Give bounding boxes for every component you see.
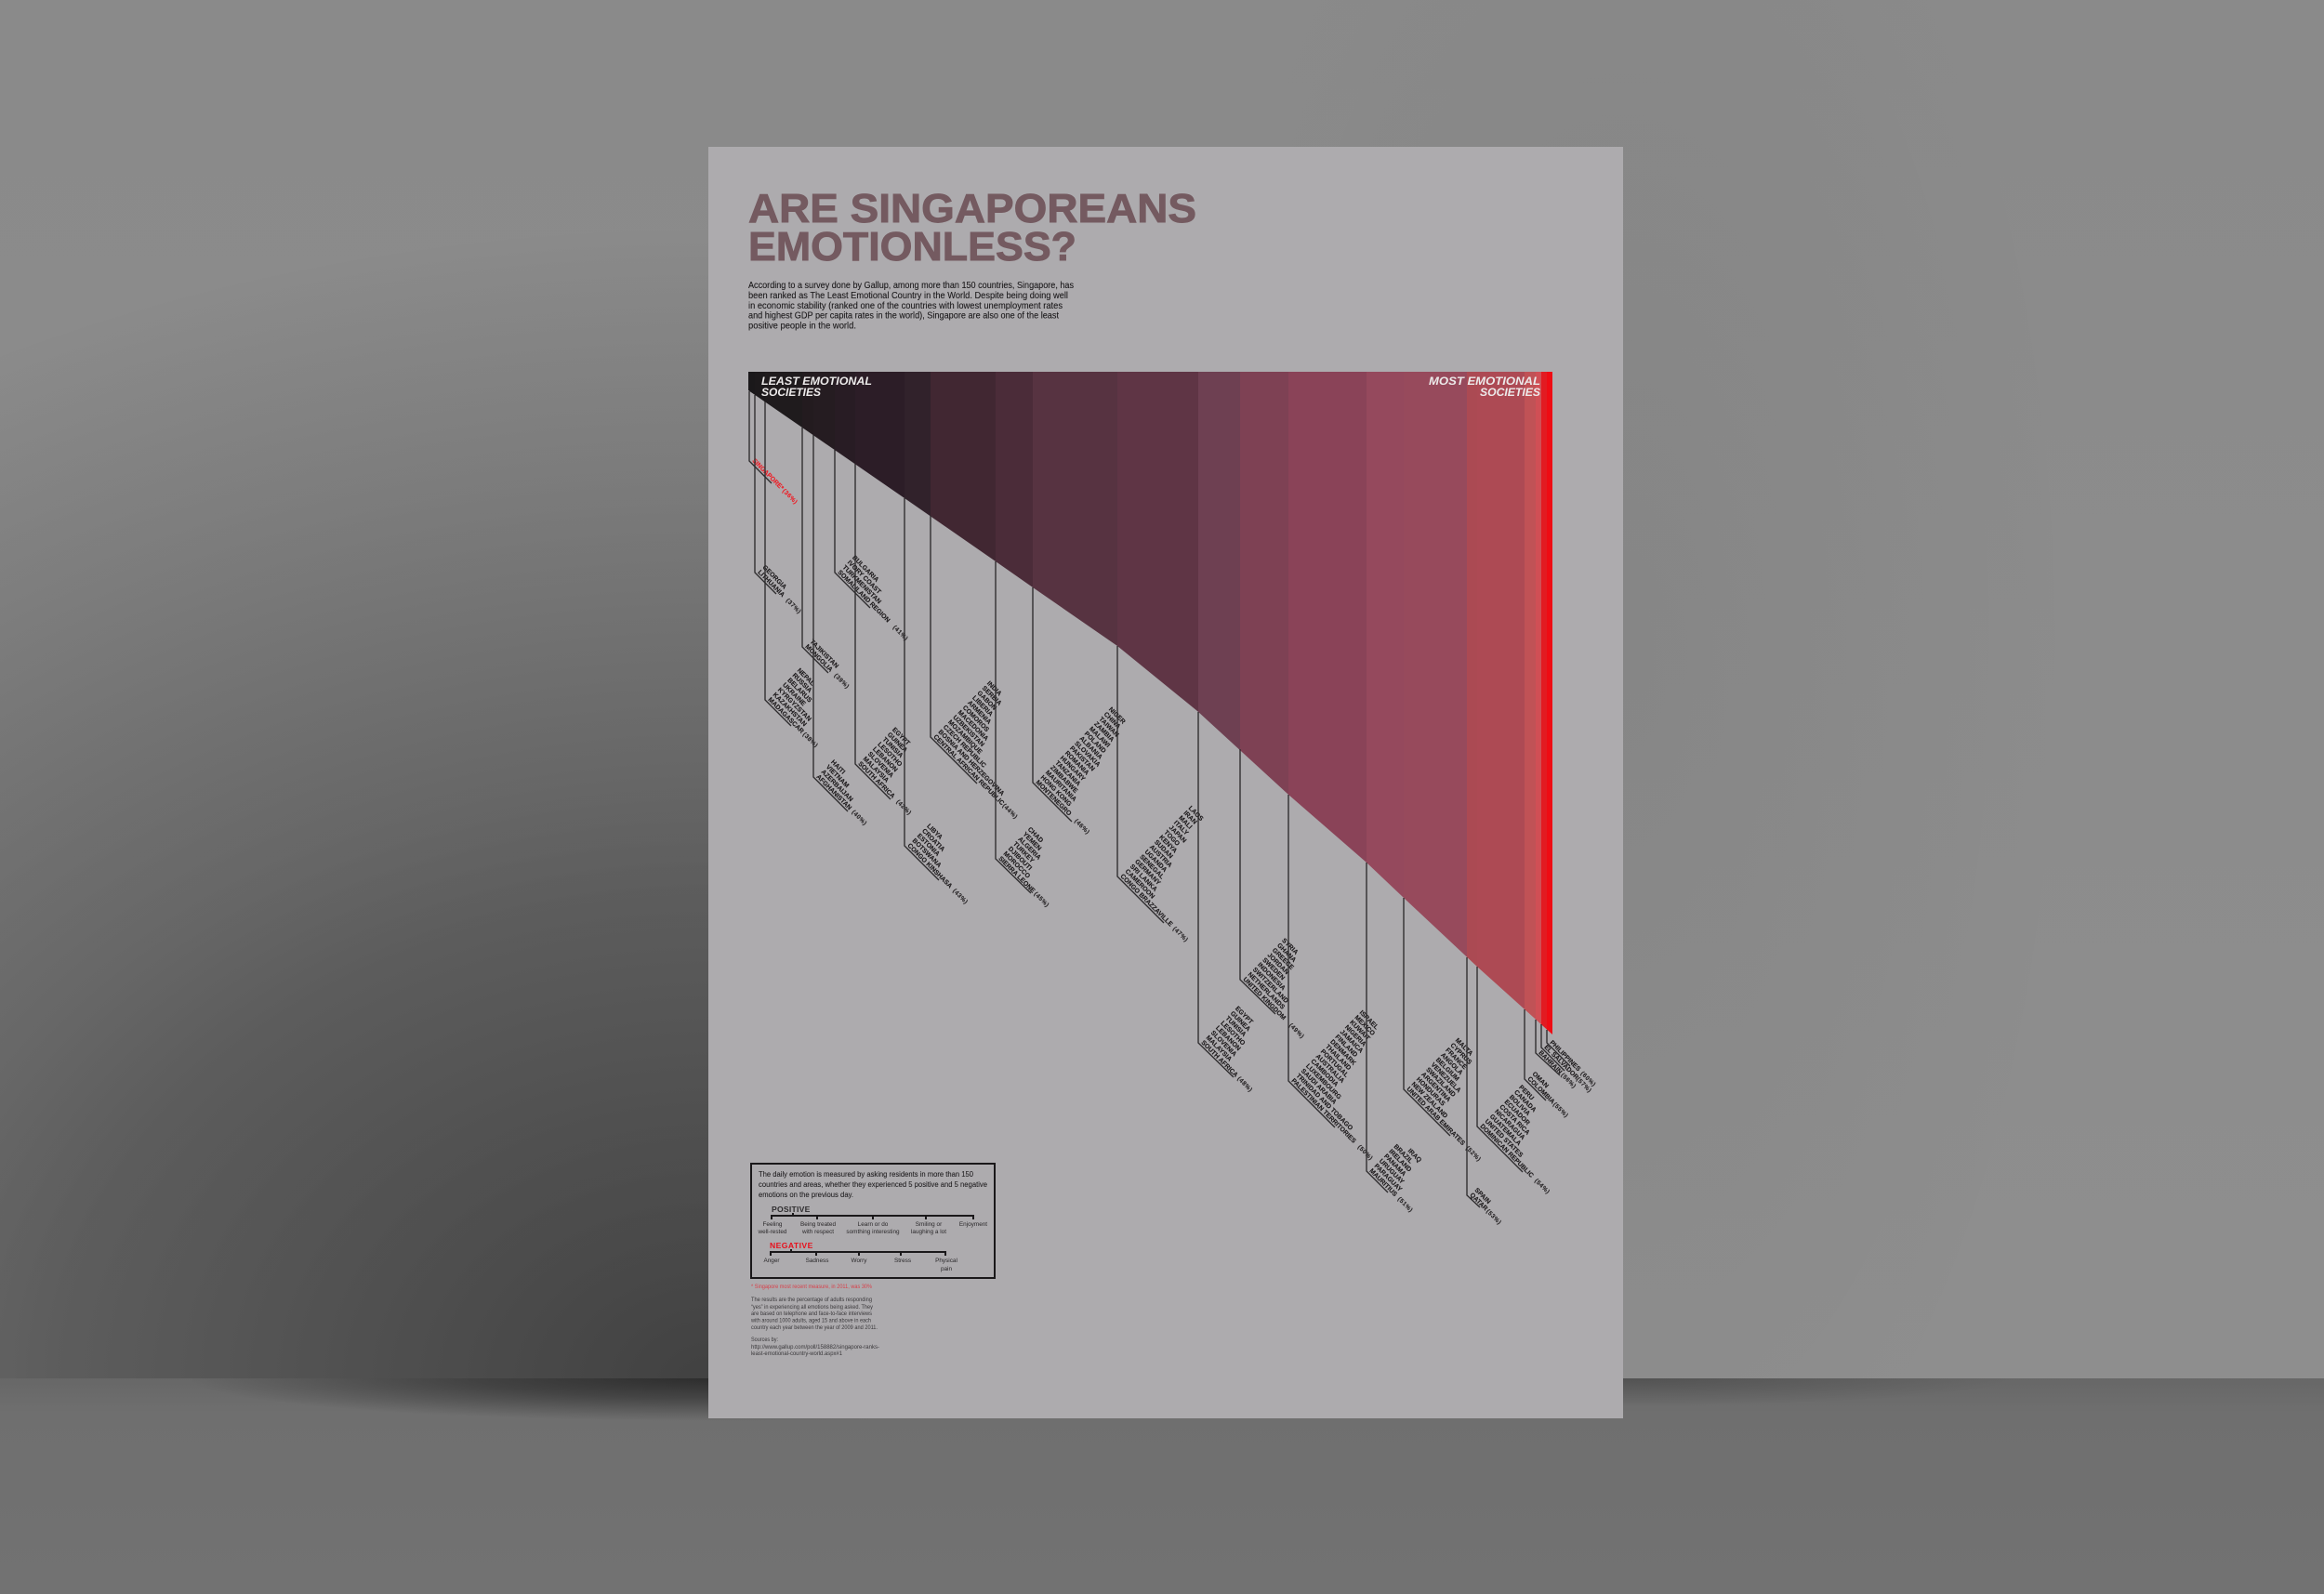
country group 50%: JAMAICA — [1339, 1029, 1364, 1055]
country group 50%: SAUDI ARABIA — [1300, 1068, 1338, 1106]
country group 42% — [855, 464, 946, 817]
positive scale — [772, 1213, 973, 1219]
country group 44%: GABON — [976, 690, 997, 712]
country group 42%: TUNISIA — [881, 736, 904, 759]
intro paragraph: and highest GDP per capita rates in the world), Singapore are also one of the least — [748, 311, 1059, 322]
country group 50%: AUSTRALIA — [1314, 1053, 1345, 1085]
negative heading: NEGATIVE — [770, 1241, 813, 1250]
country group 38%: (38%) — [801, 731, 819, 749]
country group 54%: PERU — [1517, 1085, 1535, 1101]
country group 41%: IVORY COAST — [846, 560, 882, 596]
country group 50%: LUXEMBOURG — [1304, 1063, 1342, 1101]
country group 54%: BOLIVIA — [1508, 1094, 1531, 1117]
country group 48%: GUINEA — [1229, 1010, 1251, 1033]
country group 48%: SLOVENIA — [1209, 1030, 1237, 1058]
legend description: countries and areas, whether they experienced 5 positive and 5 negative — [759, 1179, 987, 1189]
country group 54%: DOMINICAN REPUBLIC — [1478, 1123, 1535, 1179]
country group 47%: LAOS — [1187, 805, 1205, 823]
country group 45%: ALGERIA — [1016, 837, 1042, 862]
positive emotions: Learn or do — [858, 1221, 889, 1228]
country group 50%: FINLAND — [1334, 1034, 1358, 1059]
country group 46%: ROMANIA — [1063, 750, 1089, 777]
country group 53%: SPAIN — [1473, 1187, 1491, 1205]
country group 44%: BOSNIA AND HERZEGOVINA — [937, 729, 1005, 797]
negative emotions: Physical — [935, 1258, 957, 1264]
positive emotions: well-rested — [758, 1229, 787, 1235]
country group 44%: (44%) — [1001, 803, 1019, 821]
country group 40% — [813, 435, 882, 827]
country group 44%: INDIA — [985, 680, 1002, 697]
methodology note — [750, 1297, 878, 1331]
country group 41% — [835, 450, 924, 642]
country group 48%: (48%) — [1235, 1075, 1253, 1094]
country group 49%: NETHERLANDS — [1247, 971, 1286, 1011]
negative scale — [771, 1249, 945, 1256]
country group 48%: LESOTHO — [1219, 1021, 1247, 1047]
country group 50%: KUWAIT — [1348, 1020, 1371, 1043]
country group 47%: SRI LANKA — [1129, 863, 1158, 893]
country group 44%: UZBEKISTAN — [951, 715, 985, 748]
country group 36%: Singapore: (36%) — [781, 488, 799, 506]
poster artwork — [748, 193, 1595, 1357]
intro paragraph: been ranked as The Least Emotional Country in the World. Despite being doing well — [748, 291, 1068, 301]
country group 52%: SWAZILAND — [1424, 1067, 1457, 1099]
country group 57%: EL SALVADOR — [1542, 1044, 1579, 1081]
emotion gradient wedge — [748, 372, 1552, 1041]
positive emotions: Smiling or — [916, 1221, 943, 1228]
country group 47%: SENEGAL — [1138, 854, 1166, 881]
country group 47%: (47%) — [1171, 926, 1189, 943]
country group 48%: EGYPT — [1234, 1006, 1254, 1026]
label: least emotional societies: SOCIETIES — [761, 386, 821, 399]
country group 47%: JAPAN — [1168, 824, 1187, 845]
country group 38%: RUSSIA — [791, 672, 812, 694]
country group 39% — [802, 428, 855, 691]
country group 42%: EGYPT — [891, 727, 911, 747]
country group 52% — [1404, 898, 1531, 1163]
country group 46%: NIGER — [1107, 706, 1127, 726]
country group 50%: THAILAND — [1324, 1044, 1352, 1072]
country group 54%: GUATEMALA — [1488, 1113, 1522, 1147]
country group 49%: SYRIA — [1280, 938, 1299, 956]
country group 38% — [765, 402, 848, 749]
country group 44%: MACEDONIA — [957, 709, 989, 743]
country group 45%: MOROCCO — [1002, 850, 1031, 880]
country group 46%: ZIMBABWE — [1049, 765, 1079, 795]
country group 48% — [1198, 712, 1287, 1094]
country group 51%: PARAGUAY — [1373, 1163, 1403, 1193]
country group 41%: (41%) — [891, 625, 909, 642]
label: most emotional societies: MOST EMOTIONAL — [1429, 375, 1540, 388]
country group 56%: (56%) — [1559, 1073, 1578, 1090]
country group 46%: MONTENEGRO — [1034, 779, 1073, 818]
methodology note: country each year between the year of 2009 and 2011. — [751, 1324, 878, 1331]
country group 49% — [1240, 749, 1344, 1040]
country group 51%: BRAZIL — [1393, 1143, 1414, 1166]
country group 49%: GREECE — [1271, 947, 1295, 971]
country group 54%: NICARAGUA — [1493, 1109, 1525, 1141]
country group 39%: TAJIKISTAN — [809, 639, 839, 670]
country group 50%: DENMARK — [1328, 1039, 1357, 1067]
country group 40%: AFGHANISTAN — [814, 773, 852, 811]
country group 52%: (52%) — [1464, 1145, 1482, 1163]
country group 51%: URUGUAY — [1378, 1158, 1406, 1186]
country group 52%: FRANCE — [1444, 1047, 1468, 1071]
sources — [751, 1337, 879, 1357]
country group 38%: UKRAINE — [781, 682, 807, 707]
country group 39%: MONGOLIA — [803, 643, 834, 674]
country group 52%: ANGOLA — [1439, 1052, 1463, 1076]
country group 37%: (37%) — [785, 598, 802, 615]
country group 46%: PAKISTAN — [1068, 745, 1096, 772]
country group 47%: CONGO BRAZZAVILLE — [1118, 873, 1174, 929]
positive emotions: with respect — [801, 1229, 834, 1235]
country group 42%: LEBANON — [871, 746, 899, 773]
country group 47% — [1117, 646, 1257, 943]
country group 54% — [1477, 967, 1590, 1195]
country group 41%: SOMALILAND REGION — [836, 569, 891, 624]
country group 50%: NIGERIA — [1343, 1024, 1367, 1047]
country group 52%: ARGENTINA — [1419, 1072, 1451, 1103]
legend description: emotions on the previous day. — [759, 1190, 853, 1199]
country group 42%: LESOTHO — [876, 742, 904, 769]
country group 49%: GHANA — [1275, 942, 1297, 964]
label: most emotional societies — [1429, 375, 1540, 399]
country group 46%: SLOVAKIA — [1073, 741, 1101, 769]
positive emotions: Being treated — [800, 1221, 836, 1228]
title: EMOTIONLESS? — [748, 224, 1076, 270]
country group 46%: MALAWI — [1088, 726, 1111, 749]
country group 52%: MALTA — [1454, 1037, 1473, 1058]
legend description: The daily emotion is measured by asking residents in more than 150 — [759, 1169, 973, 1179]
positive emotions — [758, 1221, 987, 1235]
country group 48%: LEBANON — [1214, 1025, 1242, 1052]
country group 45%: CHAD — [1026, 826, 1044, 844]
country group 55%: (55%) — [1552, 1101, 1569, 1119]
country group 50%: TRINIDAD AND TOBAGO — [1295, 1073, 1354, 1132]
country group 47%: AUSTRIA — [1148, 844, 1173, 869]
country group 48%: TUNISIA — [1224, 1015, 1247, 1038]
country group 49%: SWITZERLAND — [1251, 967, 1289, 1005]
legend box — [751, 1164, 995, 1278]
country group 55%: COLOMBIA — [1525, 1075, 1555, 1105]
legend description — [759, 1169, 987, 1199]
sources: least-emotional-country-world.aspx#1 — [751, 1350, 842, 1357]
country group 46%: CHINA — [1103, 711, 1121, 731]
country group 45%: SIERRA LEONE — [997, 855, 1037, 895]
country group 50%: PALESTINIAN TERRITORIES — [1289, 1077, 1357, 1145]
country group 46%: MAURITANIA — [1044, 770, 1077, 803]
poster sheet — [708, 147, 1623, 1418]
country group 53%: (53%) — [1485, 1208, 1502, 1226]
country group 49%: JORDAN — [1266, 952, 1289, 976]
country group 41%: TURKMENISTAN — [841, 564, 882, 605]
country group 36%: Singapore — [749, 391, 799, 506]
country group 42%: MALAYSIA — [862, 756, 890, 784]
country group 46% — [1033, 587, 1164, 836]
country group 52%: BELGIUM — [1434, 1057, 1460, 1083]
country group 52%: CYPRUS — [1449, 1042, 1472, 1066]
country group 43% — [905, 498, 988, 905]
country group 39%: (39%) — [833, 673, 851, 691]
methodology note: “yes” in experiencing all emotions being asked. They — [751, 1304, 874, 1311]
country group 50%: (50%) — [1356, 1144, 1374, 1162]
country group 38%: MADAGASCAR — [766, 696, 805, 735]
country group 42%: SOUTH AFRICA — [856, 760, 896, 800]
country group 46%: POLAND — [1083, 731, 1107, 755]
country group 47%: IRAN — [1182, 810, 1197, 825]
country group 51%: MAURITIUS — [1367, 1167, 1398, 1198]
country group 42%: SLOVENIA — [866, 751, 894, 779]
title — [748, 186, 1196, 270]
country group 56%: BAHRAIN — [1537, 1049, 1563, 1075]
country group 45%: YEMEN — [1022, 831, 1042, 852]
country group 38%: BELARUS — [786, 678, 812, 705]
country group 57% — [1541, 1024, 1592, 1094]
country group 47%: CAMEROON — [1124, 868, 1155, 901]
country group 52%: VENEZUELA — [1430, 1061, 1462, 1094]
positive emotions: laughing a lot — [911, 1229, 946, 1235]
methodology note: with around 1000 adults, aged 15 and above in each — [750, 1318, 871, 1324]
country group 40%: VIETNAM — [825, 764, 850, 789]
methodology note: The results are the percentage of adults responding — [751, 1297, 872, 1303]
country group 45%: (45%) — [1033, 891, 1050, 909]
country group 60% — [1547, 1030, 1597, 1088]
country group 38%: KAZAKHSTAN — [772, 692, 808, 728]
country group 48%: MALAYSIA — [1205, 1034, 1233, 1063]
country group 44%: LIBERIA — [971, 695, 994, 718]
negative emotions: Stress — [894, 1258, 911, 1264]
country group 42%: (42%) — [894, 798, 913, 817]
country group 43%: CROATIA — [920, 828, 945, 853]
country group 50% — [1288, 795, 1442, 1162]
country group 41%: BULGARIA — [851, 555, 879, 584]
country group 47%: ITALY — [1172, 820, 1190, 837]
country group 55% — [1525, 1009, 1574, 1119]
intro paragraph: According to a survey done by Gallup, among more than 150 countries, Singapore, has — [748, 281, 1074, 291]
floor backdrop — [0, 1378, 2324, 1594]
country group 51%: IRAQ — [1406, 1148, 1422, 1165]
positive emotions: Feeling — [763, 1221, 783, 1228]
country group 43%: (43%) — [951, 888, 969, 905]
negative emotions: Worry — [852, 1258, 867, 1264]
country group 46%: TANZANIA — [1053, 760, 1081, 787]
title: ARE SINGAPOREANS — [748, 186, 1196, 231]
country group 54%: CANADA — [1512, 1089, 1537, 1113]
negative emotions: Sadness — [806, 1258, 828, 1264]
country group 50%: PORTUGAL — [1319, 1048, 1350, 1079]
intro paragraph — [748, 281, 1074, 331]
country group 47%: MALI — [1177, 815, 1193, 831]
country group 46%: (46%) — [1073, 818, 1090, 836]
intro paragraph: positive people in the world. — [748, 321, 856, 331]
country group 48%: SOUTH AFRICA — [1199, 1039, 1239, 1079]
country group 51%: IRELAND — [1387, 1149, 1412, 1173]
country group 37%: GEORGIA — [761, 564, 787, 591]
country group 53% — [1467, 957, 1507, 1226]
country group 57%: (57%) — [1575, 1076, 1592, 1094]
sources: Sources by: — [751, 1337, 778, 1343]
country group 54%: COSTA RICA — [1498, 1104, 1531, 1137]
country group 46%: TAIWAN — [1097, 716, 1120, 739]
sources: http://www.gallup.com/poll/158882/singapore-ranks- — [751, 1344, 879, 1350]
label: least emotional societies: LEAST EMOTIONAL — [761, 375, 872, 388]
negative emotions: Anger — [763, 1258, 780, 1264]
country group 43%: CONGO KINSHASA — [905, 842, 953, 889]
negative emotions — [763, 1258, 957, 1272]
country group 51%: PANAMA — [1382, 1153, 1406, 1178]
country group 40%: HAITI — [829, 759, 846, 776]
country group 49%: UNITED KINGDOM — [1241, 976, 1287, 1021]
country group 47%: SUDAN — [1153, 839, 1174, 860]
country group 52%: UNITED ARAB EMIRATES — [1405, 1086, 1466, 1147]
country group 60%: PHILIPPINES — [1548, 1039, 1581, 1073]
country group 44% — [931, 516, 1072, 821]
country group 50%: MEXICO — [1353, 1014, 1376, 1037]
country group 40%: (40%) — [851, 810, 868, 827]
label: least emotional societies — [761, 375, 872, 399]
country group 52%: HONDURAS — [1415, 1076, 1446, 1108]
country group 45%: DJIBOUTI — [1007, 846, 1033, 872]
country group 38%: KYRGYZSTAN — [776, 687, 812, 723]
country group 40%: AZERBAIJAN — [820, 769, 854, 803]
intro paragraph: in economic stability (ranked one of the countries with lowest unemployment rates — [748, 301, 1063, 311]
country group 45%: TURKEY — [1011, 841, 1036, 864]
country group 45% — [996, 561, 1079, 909]
country group 49%: INDONESIA — [1256, 962, 1287, 992]
country group 46%: HUNGARY — [1059, 755, 1087, 783]
country group 55%: OMAN — [1531, 1071, 1550, 1089]
country group 44%: MOZAMBIQUE — [946, 719, 984, 756]
country group 47%: TOGO — [1163, 829, 1181, 848]
label: most emotional societies: SOCIETIES — [1480, 386, 1540, 399]
country group 44%: CZECH REPUBLIC — [942, 724, 987, 770]
country group 44%: CENTRAL AFRICAN REPUBLIC — [931, 733, 1005, 807]
country group 42%: GUINEA — [886, 731, 908, 754]
country group 43%: BOTSWANA — [911, 837, 942, 869]
country group 44%: SERBIA — [981, 685, 1002, 707]
country group 50%: CAMBODIA — [1309, 1059, 1340, 1088]
singapore footnote: * Singapore most recent measure, in 2011, was 30% — [751, 1284, 872, 1290]
country group 49%: SWEDEN — [1261, 957, 1286, 981]
country group 37%: LITHUANIA — [756, 569, 786, 599]
negative emotions: pain — [941, 1266, 952, 1272]
country group 54%: UNITED STATES — [1484, 1118, 1524, 1159]
country group 53%: QATAR — [1468, 1192, 1488, 1212]
positive emotions: somthing interesting — [846, 1229, 900, 1235]
country group 49%: (49%) — [1287, 1022, 1305, 1040]
country group 43%: LIBYA — [925, 823, 944, 841]
country group 47%: UGANDA — [1143, 849, 1168, 874]
country group 44%: ARMENIA — [966, 700, 992, 726]
country group 46%: ZAMBIA — [1092, 721, 1115, 744]
country group 56% — [1536, 1020, 1578, 1090]
positive emotions: Enjoyment — [959, 1221, 987, 1228]
country group 52%: NEW ZEALAND — [1410, 1081, 1448, 1120]
country group 54%: ECUADOR — [1503, 1099, 1531, 1126]
country group 50%: ISRAEL — [1358, 1009, 1380, 1032]
methodology note: are based on telephone and face-to-face interviews — [751, 1311, 872, 1317]
country group 46%: ALBANIA — [1078, 735, 1103, 761]
country group 51%: (51%) — [1396, 1196, 1414, 1214]
country group 51% — [1367, 863, 1443, 1214]
positive heading: POSITIVE — [772, 1205, 811, 1214]
country group 47%: GERMANY — [1133, 859, 1162, 887]
country group 36%: Singapore: SINGAPORE* — [750, 457, 785, 492]
country group 44%: COMOROS — [961, 705, 990, 733]
country group 38%: NEPAL — [796, 667, 816, 688]
country group 47%: KENYA — [1157, 835, 1178, 854]
country group 37% — [755, 395, 807, 615]
country group 43%: ESTONIA — [916, 833, 941, 858]
country group 54%: (54%) — [1533, 1178, 1551, 1195]
country group 60%: (60%) — [1579, 1071, 1597, 1088]
country group 46%: HONG KONG — [1039, 774, 1073, 809]
